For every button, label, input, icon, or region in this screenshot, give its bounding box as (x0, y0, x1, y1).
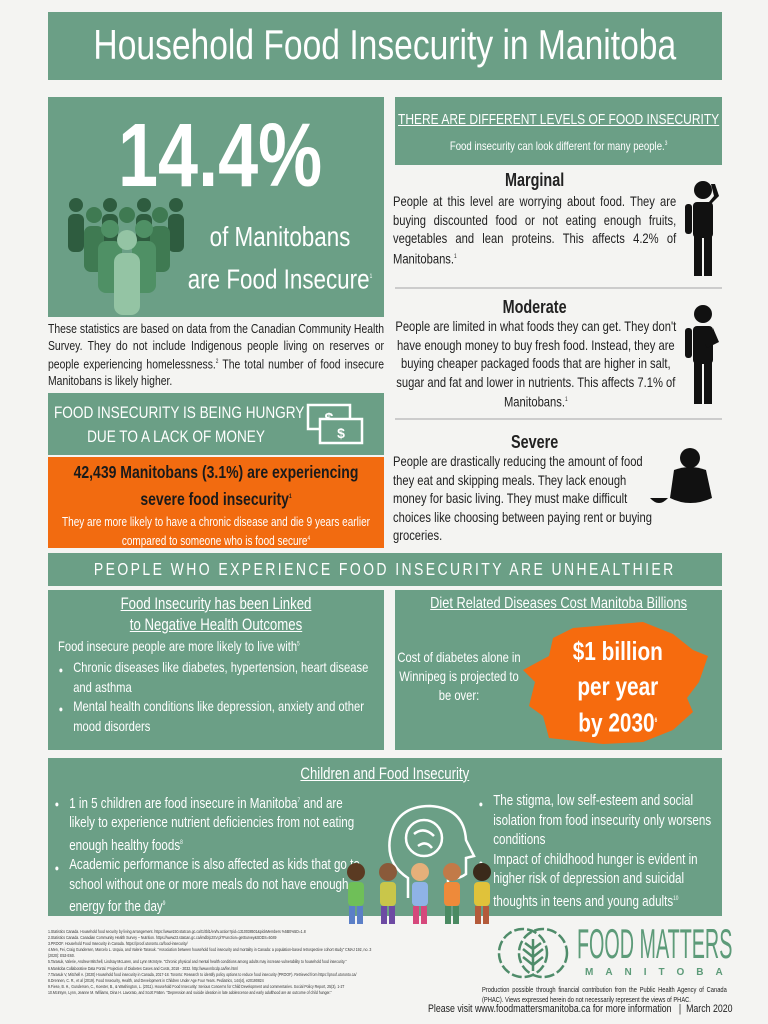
icon: sitting person with bowl (650, 448, 712, 503)
text: diabetes cost: Cost of diabetes alone in Winnipeg is projected to be over: (397, 649, 521, 703)
icon: group of people (68, 198, 184, 315)
icon: children group (347, 863, 491, 924)
references: 10.McIntyre, Lynn, Jeanne M. Williams, Dina H. Lavorato, and Scott Patten. "Depression and suicide ideation in late adolescence and early adulthood are an outcome of child hunger." (48, 990, 332, 995)
icon: hungry person (685, 305, 719, 404)
list: right (479, 793, 711, 909)
panel: hunger definition: FOOD INSECURITY IS BEING HUNGRY (54, 403, 304, 422)
references: 4.Men, Fei, Craig Gundersen, Marcelo L. Urquia, and Valerie Tarasuk. "Association between household food insecurity and mortality in Canada: a population-based retrospective cohort study" CMAJ 192, no. 3 (2020): E53-E60. (48, 947, 371, 958)
section: severe: Severe (511, 432, 558, 452)
icon: money (306, 404, 364, 444)
section: marginal (393, 170, 719, 276)
references: 7.Tarasuk V, Mitchell A. (2020) Household food insecurity in Canada, 2017-18. Toronto: Research to identify policy options to reduce food insecurity (PROOF). Retrieved from https://proof.utoronto.ca/ (48, 972, 356, 977)
section header: unhealthier: PEOPLE WHO EXPERIENCE FOOD INSECURITY ARE UNHEALTHIER (94, 559, 676, 579)
references: 5.Tarasuk, Valerie, Andrew Mitchell, Lindsay McLaren, and Lynn McIntyre. "Chronic physical and mental health conditions among adults may increase vulnerability to household food insecurity." (48, 959, 347, 964)
callout: $1 billion: by 20306 (578, 708, 657, 738)
icon: head with brain (388, 804, 476, 898)
logo: Food Matters Manitoba: FOOD MATTERS (577, 920, 732, 967)
panel: hunger definition: DUE TO A LACK OF MONEY (87, 427, 265, 446)
panel: severe stat orange: severe food insecurity1 (140, 489, 292, 509)
text: funding note: Production possible through financial contribution from the Public Health Agency of Canada (PHAC). Views expressed herein do not necessarily represent the views of PHAC. (482, 985, 727, 1004)
text: website: Please visit www.foodmattersmanitoba.ca for more information | March 2020 (428, 1003, 733, 1015)
references: 8.Drennen, C. R., et al (2019). Food Insecurity, Health, and Development in Children Under Age Four Years. Pediatrics, 144(4), e20190824 (48, 978, 264, 983)
icon: worried person (685, 181, 719, 276)
panel: severe stat orange (48, 457, 384, 548)
icon: money: $ (337, 425, 345, 441)
callout: $1 billion: per year (577, 671, 658, 701)
panel: children (48, 758, 722, 916)
section header: unhealthier (48, 553, 722, 586)
list: right: Impact of childhood hunger is evident in higher risk of depression and suicidal thoughts in teens and young adults10 (493, 852, 698, 909)
callout: $1 billion: $1 billion (573, 636, 663, 666)
text: data note: These statistics are based on data from the Canadian Community Health Survey. They do not include Indigenous people living on reserves or people experiencing homelessness.2 The total number of food insecure Manitobans is likely higher. (48, 321, 384, 388)
panel: children: Children and Food Insecurity (300, 765, 469, 783)
panel: diabetes cost: Diet Related Diseases Cost Manitoba Billions (430, 595, 687, 612)
logo: Food Matters Manitoba: MANITOBA (585, 967, 735, 978)
panel: severe stat orange: 42,439 Manitobans (3.1%) are experiencing (74, 462, 358, 482)
panel: health outcomes: Mental health conditions like depression, anxiety and other mood disorders (73, 698, 364, 734)
callout: $1 billion (523, 622, 708, 744)
section: severe: People are drastically reducing the amount of food they eat and skipping meals. They lack enough money for basic living. They must make difficult choices like choosing between paying rent or buying groceries. (393, 453, 652, 543)
panel: health outcomes: to Negative Health Outcomes (130, 616, 302, 634)
panel: severe stat orange: They are more likely to have a chronic disease and die 9 years earlier (62, 515, 370, 529)
caption: are Food Insecure1 (188, 263, 372, 294)
panel: health outcomes: Food insecure people are more likely to live with5 (58, 638, 300, 654)
section: moderate: People are limited in what foods they can get. They don't have enough money to buy fresh food. Instead, they are buying cheaper packaged foods that are higher in salt, sugar and fat and lower in nutrients. This affects 7.1% of Manitobans.1 (395, 318, 676, 410)
icon: money: $ (325, 411, 334, 428)
panel: severe stat orange: compared to someone who is food secure4 (122, 534, 310, 548)
panel: levels header: THERE ARE DIFFERENT LEVELS OF FOOD INSECURITY (398, 111, 719, 128)
panel: health outcomes: Food Insecurity has been Linked (121, 595, 311, 613)
list: right: The stigma, low self-esteem and social isolation from food insecurity only worsens conditions (493, 793, 711, 848)
list: left: 1 in 5 children are food insecure in Manitoba7 and are likely to experience nutrient deficiencies from not eating enough healthy foods8 (69, 796, 354, 854)
caption: of Manitobans (210, 221, 350, 252)
section: marginal: People at this level are worrying about food. They are buying discounted food or not eating enough fruits, vegetables and lean proteins. This affects 4.2% of Manitobans.1 (393, 193, 676, 266)
panel: 14.4% stat (48, 97, 384, 317)
panel: levels header (395, 97, 722, 165)
title bar (48, 12, 722, 80)
caption (188, 221, 372, 294)
panel: health outcomes: Chronic diseases like diabetes, hypertension, heart disease and asthma (73, 659, 368, 694)
logo: Food Matters Manitoba (498, 920, 735, 978)
panel: levels header: Food insecurity can look different for many people.3 (450, 139, 667, 153)
references: 3.PROOF. Household Food Insecurity in Canada. https://proof.utoronto.ca/food-insecurity/ (48, 941, 188, 946)
references: 6.Manitoba Collaborative Data Portal. Projection of Diabetes Cases and Costs, 2018 - 2032. http://www.mbcdp.ca/fen.html (48, 966, 238, 971)
title bar: Household Food Insecurity in Manitoba (93, 21, 676, 68)
references: 9.Fiese, B. H., Gundersen, C., Koester, B., & Washington, L. (2011). Household Food Insecurity: Serious Concerns for Child Development and commentaries. Social Policy Report, 25(3), 1-27 (48, 984, 344, 989)
panel: diabetes cost (395, 590, 722, 750)
panel: hunger definition (48, 393, 384, 455)
section: severe (393, 432, 712, 543)
panel: health outcomes (48, 590, 384, 750)
list: left: Academic performance is also affected as kids that go to school without one or more meals do not have enough energy for the day9 (69, 857, 360, 915)
big number: 14.4% (118, 106, 322, 206)
list: left (55, 796, 360, 915)
section: moderate: Moderate (503, 297, 567, 317)
references: 2.Statistics Canada. Canadian Community Health Survey – Nutrition. https://www23.statcan.gc.ca/imdb/p2SV.pl?Function=getSurvey&SDDS=5049 (48, 935, 276, 940)
section: marginal: Marginal (505, 170, 564, 190)
references (48, 929, 372, 995)
references: 1.Statistics Canada. Household food security by living arrangement. https://www150.statcan.gc.ca/t1/tbl1/en/tv.action?pid=1310038501&pickMembers %5B0%5D=1.8 (48, 929, 306, 934)
